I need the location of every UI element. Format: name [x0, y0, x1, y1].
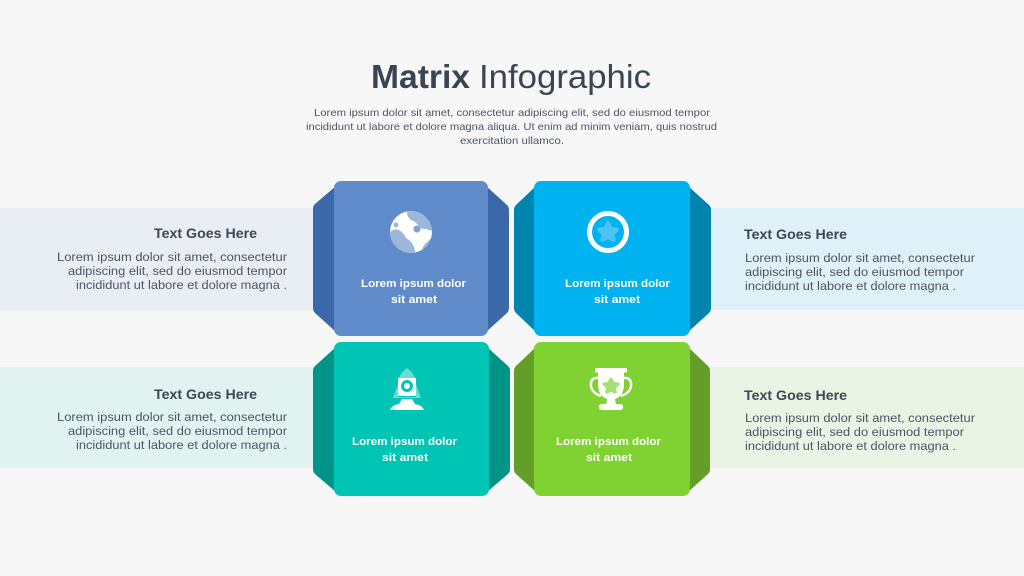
- subtitle text block: incididunt ut labore et dolore magna aliqua. Ut enim ad minim veniam, quis nostrud: [306, 121, 717, 133]
- card label: Lorem ipsum dolor: [556, 436, 662, 448]
- panel: top right text band: incididunt ut labore et dolore magna .: [745, 279, 956, 293]
- subtitle text block: [306, 107, 717, 147]
- panel: top right text band: Lorem ipsum dolor sit amet, consectetur: [745, 251, 975, 265]
- icon: planet: [390, 211, 432, 253]
- panel: top left text band: Text Goes Here: [154, 225, 257, 241]
- card label: Lorem ipsum dolor: [361, 278, 467, 290]
- card label: [361, 278, 467, 306]
- title: Infographic: [479, 58, 651, 95]
- panel: bottom left text band: adipiscing elit, sed do eiusmod tempor: [68, 424, 287, 438]
- panel: top right text band: Text Goes Here: [744, 226, 847, 242]
- card label: sit amet: [391, 294, 437, 306]
- subtitle text block: exercitation ullamco.: [460, 135, 564, 147]
- panel: bottom right text band: Lorem ipsum dolor sit amet, consectetur: [745, 411, 975, 425]
- panel: cyan card: [514, 181, 711, 336]
- panel: top left text band: adipiscing elit, sed do eiusmod tempor: [68, 264, 287, 278]
- card label: sit amet: [594, 294, 640, 306]
- panel: green card: [514, 342, 710, 496]
- panel: top right text band: adipiscing elit, sed do eiusmod tempor: [745, 265, 964, 279]
- card label: Lorem ipsum dolor: [565, 278, 671, 290]
- title: [371, 58, 651, 95]
- panel: top right text band: [710, 208, 1024, 310]
- subtitle text block: Lorem ipsum dolor sit amet, consectetur adipiscing elit, sed do eiusmod tempor: [314, 107, 711, 119]
- card label: [352, 436, 458, 464]
- card label: sit amet: [586, 452, 632, 464]
- panel: bottom left text band: incididunt ut labore et dolore magna .: [76, 438, 287, 452]
- card label: sit amet: [382, 452, 428, 464]
- panel: bottom right text band: adipiscing elit, sed do eiusmod tempor: [745, 425, 964, 439]
- icon: trophy: [591, 368, 631, 410]
- panel: top left text band: incididunt ut labore et dolore magna .: [76, 278, 287, 292]
- panel: bottom left text band: Lorem ipsum dolor sit amet, consectetur: [57, 410, 287, 424]
- panel: bottom right text band: [710, 367, 1024, 468]
- panel: bottom left text band: [0, 367, 314, 468]
- panel: bottom right text band: Text Goes Here: [744, 387, 847, 403]
- panel: blue card: [313, 181, 509, 336]
- card label: [556, 436, 662, 464]
- card label: [565, 278, 671, 306]
- card label: Lorem ipsum dolor: [352, 436, 458, 448]
- panel: bottom left text band: Text Goes Here: [154, 386, 257, 402]
- panel: top left text band: [0, 208, 314, 310]
- icon: rocket: [390, 368, 424, 410]
- icon: star badge: [590, 214, 626, 250]
- panel: teal card: [313, 342, 510, 496]
- title: Matrix: [371, 58, 471, 95]
- panel: bottom right text band: incididunt ut labore et dolore magna .: [745, 439, 956, 453]
- panel: top left text band: Lorem ipsum dolor sit amet, consectetur: [57, 250, 287, 264]
